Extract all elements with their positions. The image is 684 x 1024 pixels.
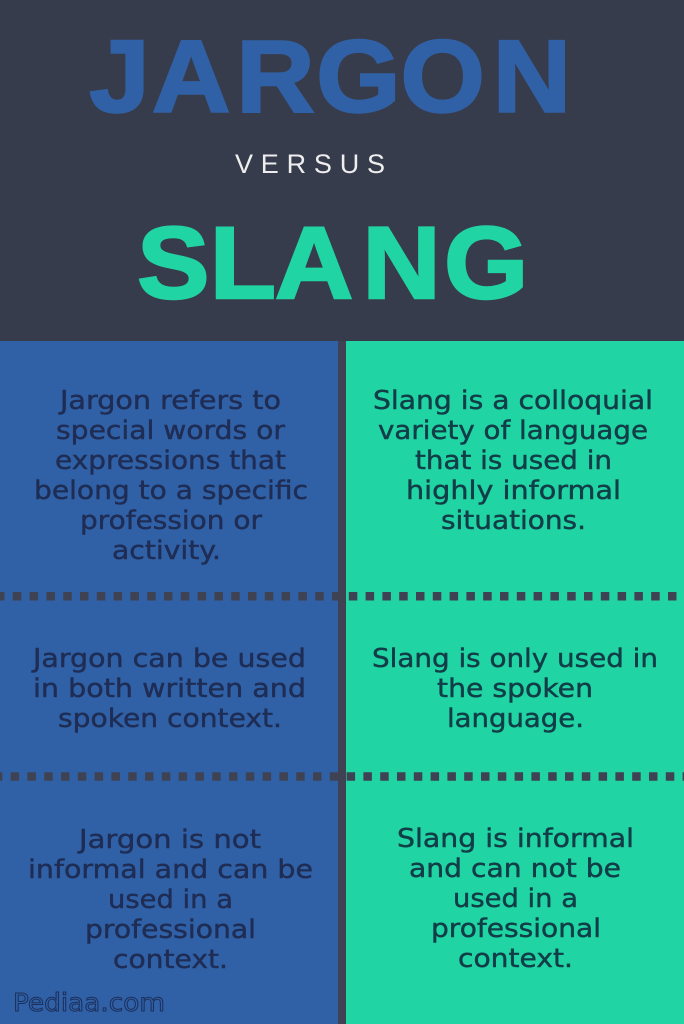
text block: jargon definition: expressions that: [55, 446, 286, 476]
center divider: [338, 341, 346, 1024]
text block: slang definition: variety of language: [378, 416, 648, 446]
text block: jargon usage: Jargon can be used: [31, 644, 306, 674]
text block: jargon formality: [28, 825, 313, 975]
text block: slang usage: the spoken: [437, 674, 593, 704]
text block: jargon definition: activity.: [112, 536, 221, 566]
dotted divider: upper: [0, 592, 684, 601]
text block: jargon formality: professional: [85, 915, 256, 945]
text block: slang formality: context.: [458, 944, 573, 974]
text block: jargon usage: in both written and: [33, 674, 306, 704]
title: Jargon: JARGON: [90, 20, 571, 134]
text block: jargon definition: Jargon refers to: [58, 386, 281, 416]
watermark: Pediaa.com: Pediaa.com: [13, 988, 165, 1017]
text block: slang usage: Slang is only used in: [372, 644, 658, 674]
text block: jargon definition: special words or: [56, 416, 286, 446]
text block: jargon definition: [34, 386, 308, 566]
text block: slang definition: [373, 386, 653, 536]
text block: slang formality: [397, 824, 634, 974]
text block: slang usage: [372, 644, 658, 734]
text block: slang definition: that is used in: [415, 446, 612, 476]
text block: jargon definition: profession or: [80, 506, 263, 536]
text block: slang formality: Slang is informal: [397, 824, 634, 854]
text block: slang definition: situations.: [441, 506, 586, 536]
text block: jargon usage: [31, 644, 306, 734]
text block: jargon usage: spoken context.: [58, 704, 282, 734]
panel: slang column: [346, 341, 684, 1024]
title: Slang: SLANG: [137, 207, 528, 320]
text block: slang definition: Slang is a colloquial: [373, 386, 653, 416]
text block: jargon definition: belong to a specific: [34, 476, 308, 506]
text block: jargon formality: informal and can be: [28, 855, 313, 885]
panel: jargon column: [0, 341, 338, 1024]
text block: jargon formality: used in a: [108, 885, 233, 915]
text block: jargon formality: Jargon is not: [77, 825, 261, 855]
text block: slang formality: used in a: [453, 884, 578, 914]
text block: slang definition: highly informal: [406, 476, 621, 506]
text block: slang formality: professional: [431, 914, 601, 944]
dotted divider: lower: [0, 772, 684, 781]
subtitle: versus: VERSUS: [235, 149, 385, 179]
text block: slang formality: and can not be: [409, 854, 621, 884]
text block: slang usage: language.: [447, 704, 584, 734]
text block: jargon formality: context.: [113, 945, 228, 975]
